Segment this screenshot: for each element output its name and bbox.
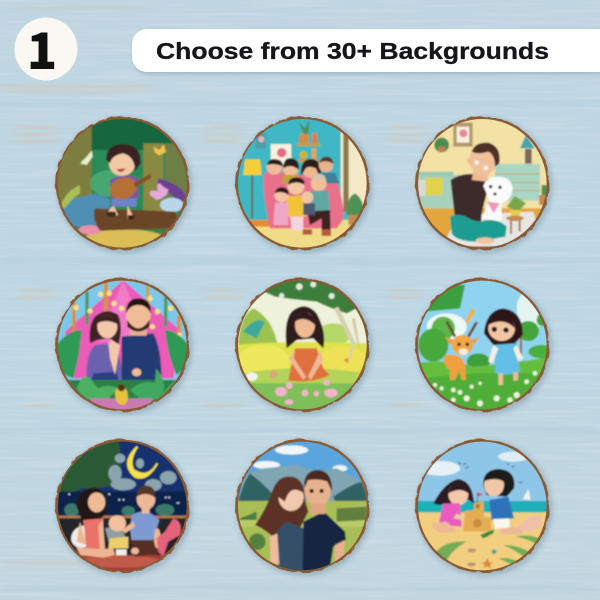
badge: step number: 1: [27, 12, 57, 84]
ornament 8: couple with mountains: [233, 435, 373, 581]
ornament 3: man with white dog: [413, 113, 553, 253]
badge: step number: [14, 12, 78, 84]
ornament 6: girl with deer: [413, 275, 555, 415]
ornament 1: forest boy with guitar: [53, 113, 193, 257]
ornament 2: family on pink sofa: [233, 113, 373, 257]
title pill: Choose from 30+ Backgrounds: [156, 38, 549, 64]
ornament 4: couple under pink tent: [53, 275, 193, 417]
ornament 7: night family with moon: [53, 435, 193, 576]
title pill: [132, 29, 600, 74]
ornament 5: woman in meadow: [232, 275, 375, 417]
ornament 9: kids building sandcastle: [413, 435, 553, 579]
